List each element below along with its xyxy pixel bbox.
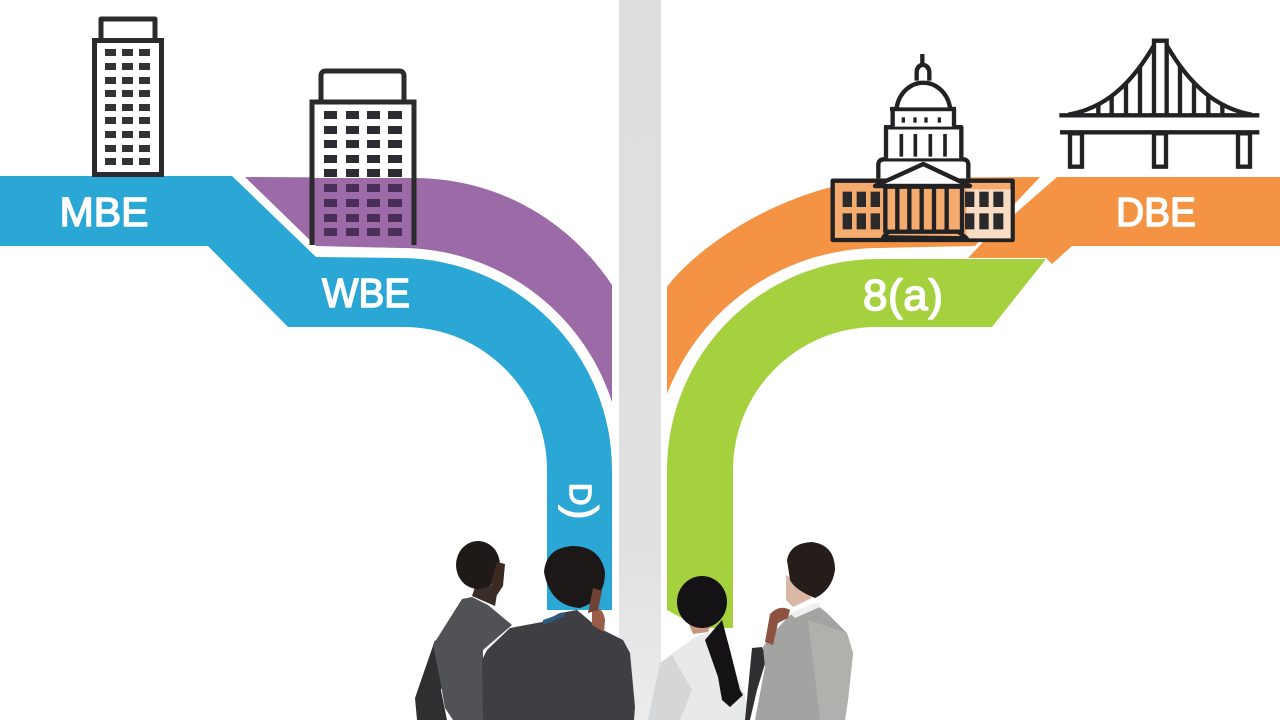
person: man far right — [745, 542, 853, 720]
label: 8(a): 8(a) — [863, 271, 943, 320]
label: DBE: DBE — [1116, 189, 1196, 235]
label: rotated D) on blue road: ) — [558, 505, 606, 520]
person: woman — [648, 576, 750, 720]
person: man far left — [415, 541, 512, 720]
orange DBE road — [968, 177, 1280, 264]
people watching the roads — [415, 541, 853, 720]
green road — [667, 259, 1046, 628]
icon: suspension bridge — [1059, 41, 1259, 167]
orange road left branch — [667, 177, 1040, 394]
blue road — [0, 176, 612, 610]
person: man centre left — [482, 546, 635, 720]
purple WBE road — [245, 177, 612, 402]
icon: small office tower — [94, 19, 162, 174]
label: WBE: WBE — [322, 270, 410, 316]
icon: capitol building — [833, 54, 1013, 240]
label: rotated D) on blue road: D — [563, 483, 598, 505]
icon: large office tower — [312, 71, 414, 245]
label: MBE: MBE — [60, 189, 148, 235]
label: rotated D) on blue road — [558, 483, 606, 520]
central divider column — [619, 0, 661, 720]
